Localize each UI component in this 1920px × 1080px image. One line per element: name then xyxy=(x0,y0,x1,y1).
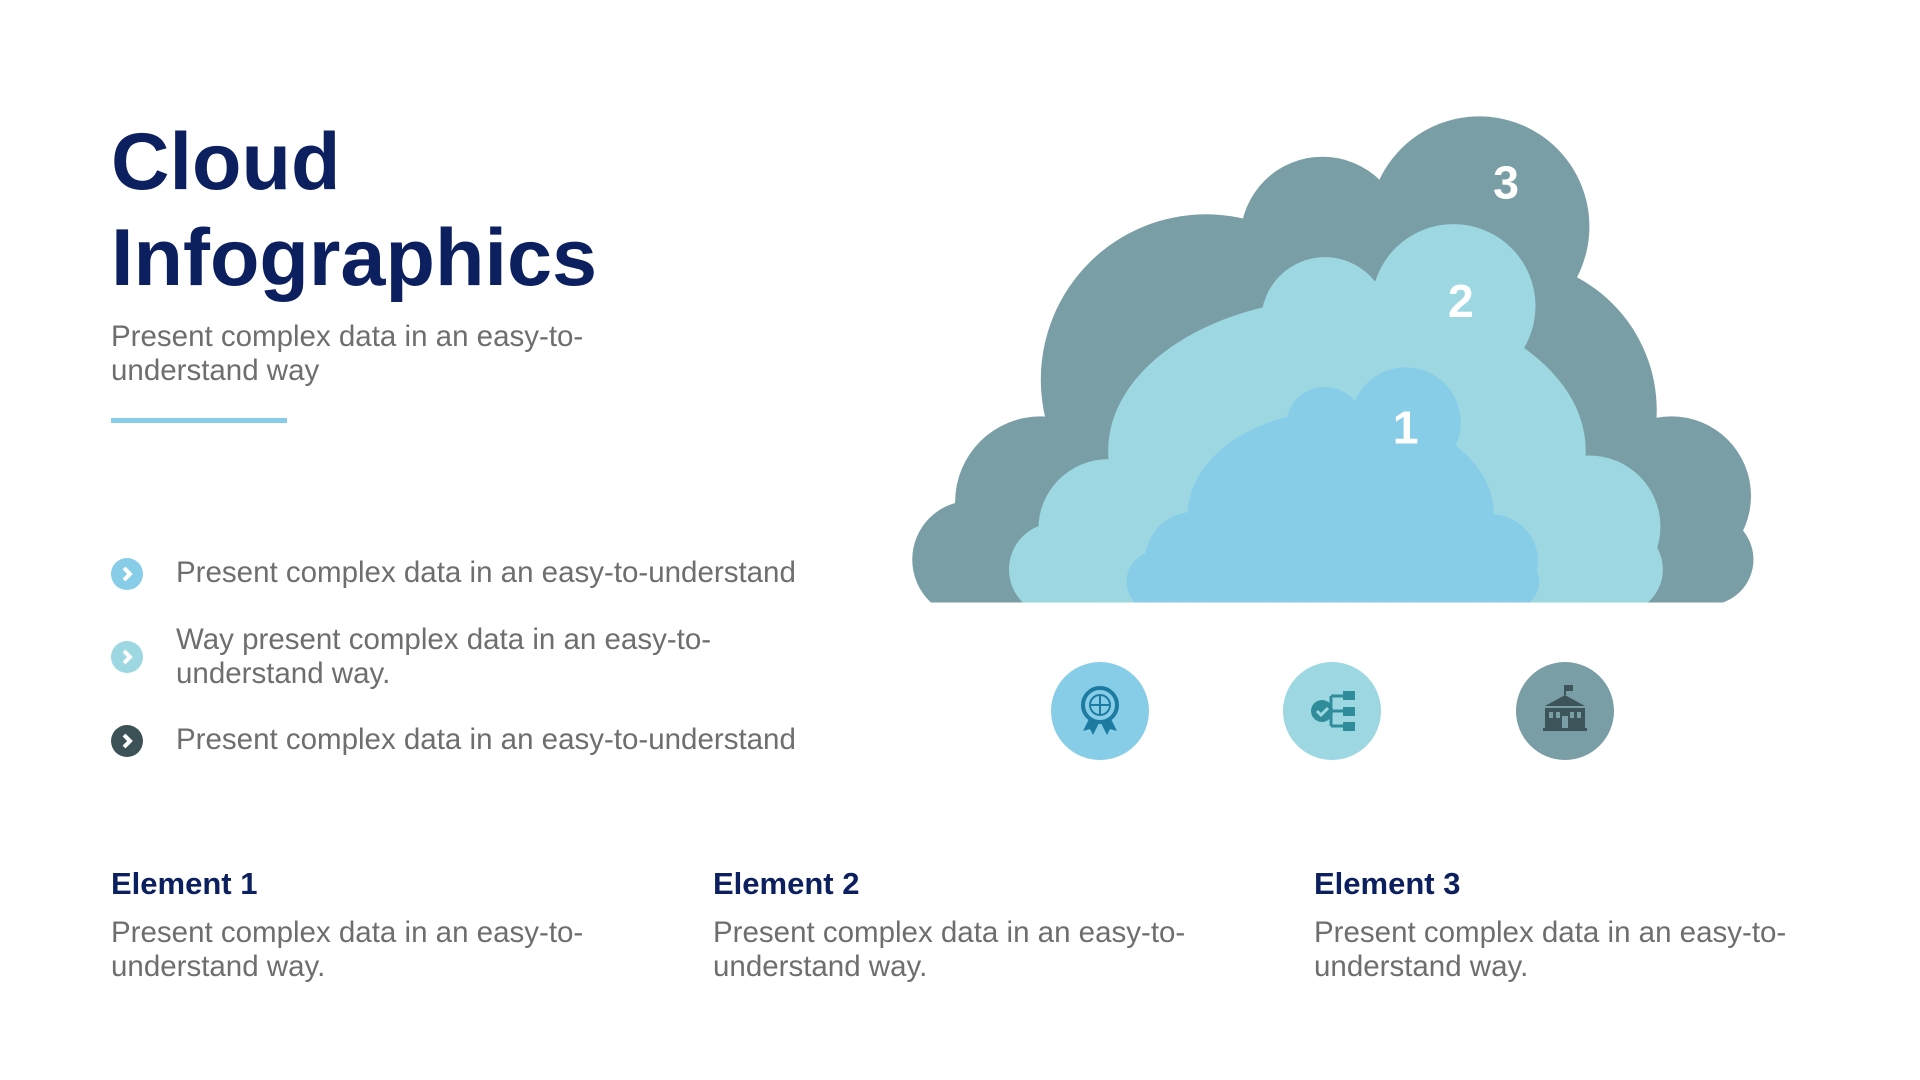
element 1 xyxy=(111,866,583,983)
cloud layer 1 xyxy=(1127,367,1539,618)
element 1: Element 1 xyxy=(111,866,257,901)
element 3: Present complex data in an easy-to-understand way. xyxy=(1314,916,1786,983)
element 3 xyxy=(1314,866,1786,983)
accent line xyxy=(111,418,287,423)
icon: building xyxy=(1516,662,1614,760)
element 1: Present complex data in an easy-to-understand way. xyxy=(111,916,583,983)
icon: globe award xyxy=(1051,662,1149,760)
bullet 2: Way present complex data in an easy-to-understand way. xyxy=(176,623,711,690)
numbers: 2 xyxy=(1448,275,1474,327)
element 2 xyxy=(713,866,1185,983)
cloud layer 2 xyxy=(1009,224,1663,616)
cloud layer 3 xyxy=(912,116,1753,618)
subtitle: Present complex data in an easy-to-understand way xyxy=(111,320,583,387)
element 2: Element 2 xyxy=(713,866,859,901)
bullet list xyxy=(111,556,796,757)
bullet 1: Present complex data in an easy-to-understand xyxy=(176,556,796,589)
numbers: 1 xyxy=(1393,401,1419,453)
title xyxy=(111,117,597,303)
title: Cloud xyxy=(111,117,340,207)
numbers xyxy=(1393,156,1519,453)
element 3: Element 3 xyxy=(1314,866,1460,901)
title: Infographics xyxy=(111,213,597,303)
element 2: Present complex data in an easy-to-understand way. xyxy=(713,916,1185,983)
icon: process flow xyxy=(1283,662,1381,760)
bullet 3: Present complex data in an easy-to-understand xyxy=(176,723,796,756)
cloud diagram xyxy=(912,116,1754,602)
numbers: 3 xyxy=(1493,156,1519,208)
